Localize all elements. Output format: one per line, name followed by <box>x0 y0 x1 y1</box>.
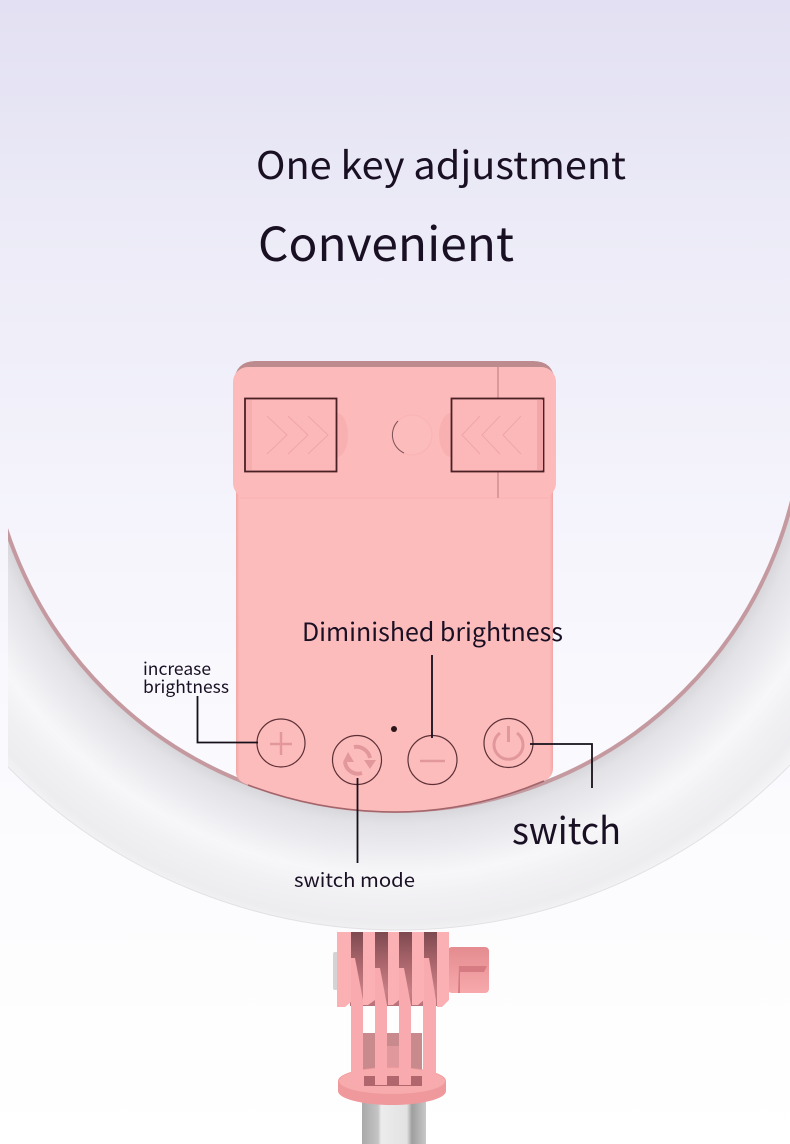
tripod mount <box>333 932 489 1144</box>
base block <box>363 1033 422 1077</box>
ring light <box>8 500 790 930</box>
title line 2: Convenient <box>258 206 514 275</box>
callout lines <box>198 655 592 863</box>
centre circle <box>392 415 432 455</box>
label: diminished brightness: Diminished brightness <box>302 613 563 649</box>
button: switch mode <box>332 736 382 784</box>
pink controller <box>233 361 556 812</box>
prongs <box>351 958 436 1088</box>
ring inner rim <box>8 500 790 813</box>
label: switch mode: switch mode <box>294 866 415 893</box>
label: switch: switch <box>512 801 621 855</box>
mount gaps <box>350 932 438 1006</box>
label: increase brightness: brightness <box>143 673 229 698</box>
indicator dot <box>391 726 397 732</box>
label: increase brightness <box>143 655 229 698</box>
side screw <box>333 952 338 990</box>
controller head <box>233 367 556 498</box>
controller back edge <box>234 361 555 400</box>
base disc <box>338 1067 446 1105</box>
head lower shadow <box>240 497 549 499</box>
button: plus <box>257 719 305 767</box>
button: minus <box>408 736 457 784</box>
side knob <box>448 947 489 993</box>
left slider <box>245 398 336 472</box>
label: increase brightness: increase <box>143 655 211 680</box>
button: power <box>484 718 533 768</box>
pole <box>362 1100 426 1144</box>
left half circle <box>337 413 348 457</box>
controller bottom shadow <box>248 781 544 812</box>
right slider <box>452 398 544 472</box>
controller body <box>236 470 553 812</box>
title <box>256 135 626 275</box>
right half circle <box>439 413 451 457</box>
title line 1: One key adjustment <box>256 135 626 190</box>
plates <box>337 932 449 1007</box>
seam lines <box>497 367 499 498</box>
